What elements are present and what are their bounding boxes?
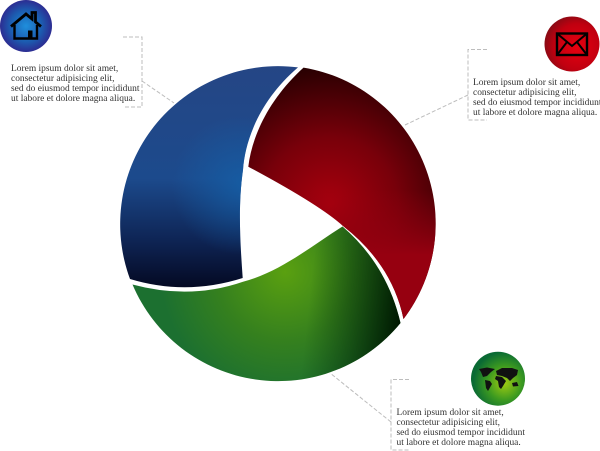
text: top right callout: ut labore et dolore magna aliqua.	[473, 108, 597, 118]
text: top right callout: consectetur adipisicing elit,	[473, 88, 577, 98]
text: bottom callout: ut labore et dolore magna aliqua.	[396, 438, 521, 448]
segment: blue	[120, 66, 298, 287]
leader: top left callout	[123, 37, 174, 107]
text: bottom callout: Lorem ipsum dolor sit amet,	[396, 408, 504, 418]
pie chart	[120, 66, 436, 381]
leader: bottom callout	[330, 373, 409, 450]
text: bottom callout: consectetur adipisicing elit,	[396, 418, 500, 428]
text: top left callout: sed do eiusmod tempor incididunt	[11, 84, 140, 94]
text: top left callout: Lorem ipsum dolor sit amet,	[11, 64, 118, 74]
icon: globe	[471, 352, 525, 406]
text: top right callout: Lorem ipsum dolor sit amet,	[473, 78, 580, 88]
text: top right callout: sed do eiusmod tempor incididunt	[473, 98, 600, 108]
segment: green	[132, 226, 400, 381]
icon: envelope	[544, 16, 600, 72]
leader: top right callout	[405, 50, 487, 125]
icon: house	[0, 0, 52, 52]
text: top left callout: consectetur adipisicing elit,	[11, 74, 115, 84]
text: top left callout: ut labore et dolore magna aliqua.	[11, 94, 135, 104]
text: bottom callout: sed do eiusmod tempor incididunt	[396, 428, 525, 438]
segment: red	[248, 68, 436, 319]
